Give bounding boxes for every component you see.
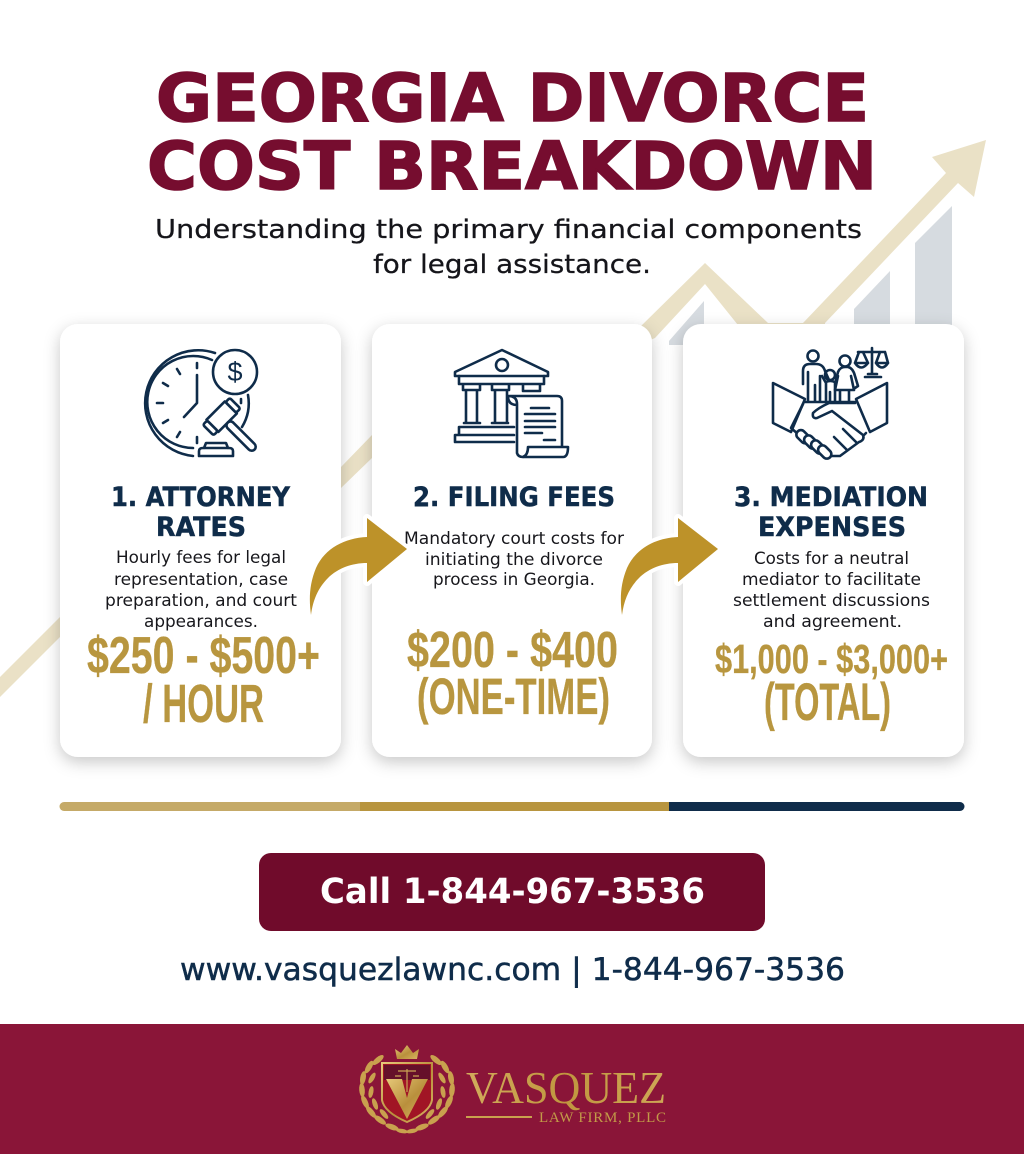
description: and agreement.: [763, 612, 902, 631]
icon: clock, dollar and gavel: [145, 350, 268, 463]
price: (TOTAL): [764, 673, 891, 732]
icon: crown: [395, 1045, 419, 1059]
description: process in Georgia.: [433, 570, 595, 589]
icon: shield: [382, 1063, 432, 1122]
description: appearances.: [144, 612, 258, 631]
arrow: filing to mediation: [621, 518, 718, 615]
price: [87, 627, 320, 734]
price: $250 - $500+: [87, 627, 320, 685]
heading: 2. FILING FEES: [413, 482, 615, 513]
wordmark: VASQUEZ: [466, 1062, 666, 1113]
subtitle: Understanding the primary financial components: [155, 215, 862, 245]
description: [105, 548, 298, 631]
background bars: [669, 206, 952, 345]
title: COST BREAKDOWN: [147, 128, 877, 205]
price: [715, 636, 948, 732]
price: (ONE-TIME): [417, 668, 610, 725]
panel: mediation expenses: [683, 324, 964, 757]
subtitle: for legal assistance.: [373, 250, 651, 280]
subtitle: [155, 215, 862, 280]
panel: filing fees: [372, 324, 652, 757]
footer band: [0, 1024, 1024, 1154]
description: representation, case: [114, 570, 288, 589]
background arrow: [0, 140, 986, 707]
price: / HOUR: [143, 674, 264, 734]
description: [404, 529, 624, 589]
heading: 1. ATTORNEY: [111, 482, 291, 513]
title: [147, 60, 877, 205]
title: GEORGIA DIVORCE: [156, 60, 869, 137]
heading: EXPENSES: [758, 512, 906, 543]
icon: clock, dollar and gavel: $: [227, 357, 243, 387]
heading: RATES: [156, 512, 246, 543]
icon: family, scales and handshake: [773, 348, 888, 460]
progress bar: [60, 802, 964, 811]
description: mediator to facilitate: [742, 570, 921, 589]
arrow: attorney to filing: [310, 518, 407, 615]
description: initiating the divorce: [425, 550, 603, 569]
description: preparation, and court: [105, 591, 298, 610]
background: rising chart: [0, 140, 986, 707]
price: $200 - $400: [407, 621, 618, 678]
description: Costs for a neutral: [754, 549, 909, 568]
call button: Call 1-844-967-3536: [320, 872, 705, 912]
price: $1,000 - $3,000+: [715, 636, 948, 682]
heading: [111, 482, 291, 543]
logo: Vasquez Law Firm: [359, 1045, 666, 1134]
description: Mandatory court costs for: [404, 529, 624, 548]
wordmark: LAW FIRM, PLLC: [539, 1110, 666, 1126]
description: settlement discussions: [733, 591, 930, 610]
price: [407, 621, 618, 725]
icon: courthouse and document: [455, 350, 568, 457]
website and phone: www.vasquezlawnc.com | 1-844-967-3536: [180, 952, 845, 988]
description: [733, 549, 930, 631]
icon: laurel wreath: [359, 1053, 455, 1134]
call button: [259, 853, 765, 931]
heading: [734, 482, 928, 543]
description: Hourly fees for legal: [116, 548, 286, 567]
panel: attorney rates: [60, 324, 341, 757]
heading: 3. MEDIATION: [734, 482, 928, 513]
